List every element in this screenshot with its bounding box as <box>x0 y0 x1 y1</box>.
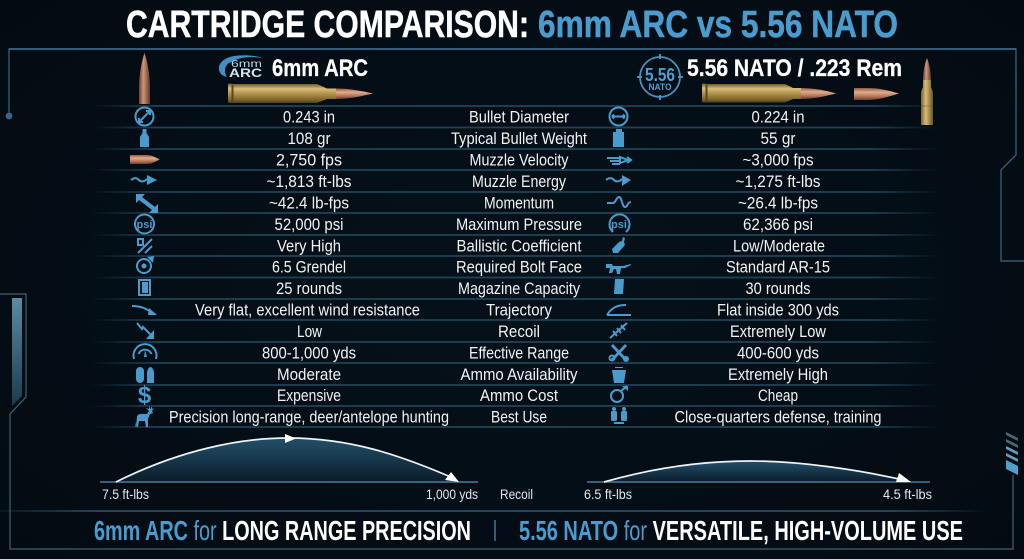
row: muzzle energy: Muzzle Energy <box>472 172 567 191</box>
row: effective range: 400-600 yds <box>737 344 819 362</box>
row: muzzle energy: ~1,275 ft-lbs <box>736 172 820 191</box>
6mm ARC logo: 6mm <box>231 58 262 70</box>
icon: momentum right <box>607 197 631 207</box>
icon: dollar left: $ <box>138 382 152 409</box>
row: muzzle energy: ~1,813 ft-lbs <box>266 172 352 191</box>
5.56 NATO badge <box>637 54 683 100</box>
row: muzzle velocity <box>276 150 814 170</box>
icon: energy left <box>131 175 157 185</box>
icon: psi right <box>610 214 630 232</box>
icon: trajectory left <box>132 306 157 315</box>
icon: cup right <box>612 367 626 383</box>
icon: ballistic coefficient right <box>612 237 625 253</box>
row: required bolt face: Standard AR-15 <box>726 258 830 276</box>
5.56 NATO heading: 5.56 NATO / .223 Rem <box>687 55 902 82</box>
row: required bolt face <box>272 258 830 276</box>
row: trajectory <box>195 300 839 320</box>
icon: psi right: psi <box>611 219 627 231</box>
row: ballistic coefficient: Ballistic Coefficient <box>456 236 582 256</box>
row: ballistic coefficient <box>277 236 825 256</box>
6mm ARC logo: ARC <box>229 66 262 80</box>
row: bullet diameter: Bullet Diameter <box>469 108 569 126</box>
table row lines <box>90 106 940 427</box>
vertical 5.56 cartridge <box>921 58 933 125</box>
row: best use: Best Use <box>491 408 547 426</box>
row: momentum: ~26.4 lb-fps <box>738 194 818 212</box>
row: bullet diameter: 0.224 in <box>752 108 804 126</box>
icon: two figures right <box>611 407 627 423</box>
6mm ARC logo <box>219 55 262 80</box>
title <box>126 4 898 46</box>
row: maximum pressure: Maximum Pressure <box>456 215 582 234</box>
row: trajectory: Trajectory <box>486 300 553 320</box>
row: bullet diameter <box>283 108 804 126</box>
row: bullet diameter: 0.243 in <box>283 108 335 126</box>
row: ammo cost <box>277 386 798 405</box>
icon: recoil left <box>137 323 154 339</box>
6mm ARC heading: 6mm ARC <box>272 55 368 82</box>
recoil chart: 5.56 NATO: 6.5 ft-lbs <box>584 486 632 502</box>
row: bullet weight <box>288 129 796 148</box>
row: best use: Precision long-range, deer/antelope hunting <box>169 408 449 426</box>
icon: magazine right <box>614 279 624 294</box>
icon: momentum left <box>136 194 158 213</box>
icon: crossed tools right <box>610 345 629 362</box>
5.56 NATO cartridge <box>702 84 836 102</box>
icon: rifle right <box>606 264 631 274</box>
row: ammo availability: Moderate <box>277 365 341 384</box>
row: recoil: Extremely Low <box>730 322 827 341</box>
row: ammo cost: Expensive <box>277 386 341 405</box>
row: maximum pressure <box>274 215 813 234</box>
icon: deer left <box>135 406 154 427</box>
icon: magazine left <box>139 280 150 295</box>
row: magazine capacity: 30 rounds <box>746 279 810 298</box>
icon: psi left <box>135 214 154 234</box>
row: ballistic coefficient: Very High <box>277 236 341 256</box>
recoil chart: 6mm ARC: 7.5 ft-lbs <box>102 486 149 502</box>
title: CARTRIDGE COMPARISON: <box>126 4 529 46</box>
row: ammo availability <box>277 365 828 384</box>
row: muzzle velocity: 2,750 fps <box>276 150 342 170</box>
row: magazine capacity: 25 rounds <box>276 279 342 298</box>
row: momentum <box>269 194 818 212</box>
icon: diameter left <box>136 108 154 126</box>
row: recoil: Low <box>297 322 323 341</box>
row: ammo availability: Ammo Availability <box>460 365 578 384</box>
row: bullet weight: 55 gr <box>760 129 796 148</box>
row: best use <box>169 408 882 426</box>
row: maximum pressure: 52,000 psi <box>274 215 344 234</box>
row: required bolt face: 6.5 Grendel <box>272 258 346 276</box>
recoil chart: 5.56 NATO <box>584 461 932 502</box>
row: ammo cost: Ammo Cost <box>480 386 558 405</box>
row: muzzle velocity: Muzzle Velocity <box>470 150 569 170</box>
row: effective range: 800-1,000 yds <box>262 344 356 362</box>
row: ballistic coefficient: Low/Moderate <box>733 236 825 256</box>
icon: psi left: psi <box>137 219 152 231</box>
icon: gauge left <box>134 344 156 359</box>
row: required bolt face: Required Bolt Face <box>456 258 582 276</box>
6mm ARC cartridge <box>228 84 373 103</box>
icon: ammo left <box>136 367 154 383</box>
icon: bolt face left <box>137 256 154 273</box>
row: bullet weight: 108 gr <box>288 129 331 148</box>
row: recoil: Recoil <box>498 322 540 341</box>
icon: velocity bullet <box>130 155 160 164</box>
row: magazine capacity <box>276 279 810 298</box>
row: ammo cost: Cheap <box>758 386 798 405</box>
comparison table <box>169 108 882 426</box>
row: ammo availability: Extremely High <box>728 365 828 384</box>
recoil chart: 5.56 NATO: 4.5 ft-lbs <box>883 486 932 502</box>
icon: diameter right <box>610 108 628 126</box>
5.56 NATO badge: NATO <box>648 82 672 92</box>
icon: weight left <box>140 129 149 147</box>
row: recoil <box>297 322 827 341</box>
recoil label: Recoil <box>500 486 533 502</box>
left vertical bullet <box>139 53 150 104</box>
icon: energy right <box>606 175 631 186</box>
row: best use: Close-quarters defense, training <box>674 408 882 426</box>
recoil chart: 6mm ARC: 1,000 yds <box>426 486 478 502</box>
icon: velocity right <box>607 157 631 164</box>
row: momentum: Momentum <box>484 194 554 212</box>
loose bullet <box>854 88 899 100</box>
recoil chart: 6mm ARC <box>100 434 478 502</box>
footer: 6mm ARC verdict: 6mm ARC for LONG RANGE PRECISION <box>94 515 471 546</box>
row: trajectory: Very flat, excellent wind resistance <box>195 300 420 320</box>
row: magazine capacity: Magazine Capacity <box>458 279 581 298</box>
row: momentum: ~42.4 lb-fps <box>269 194 349 212</box>
row: muzzle velocity: ~3,000 fps <box>742 150 814 170</box>
row: trajectory: Flat inside 300 yds <box>717 300 839 320</box>
icon: male symbol right <box>611 386 628 402</box>
row: maximum pressure: 62,366 psi <box>743 215 813 234</box>
row: effective range: Effective Range <box>469 344 569 362</box>
title: 6mm ARC vs 5.56 NATO <box>538 4 898 46</box>
5.56 NATO badge: 5.56 <box>645 65 675 85</box>
row: effective range <box>262 344 819 362</box>
icon: trajectory right <box>607 305 631 315</box>
row: bullet weight: Typical Bullet Weight <box>451 129 587 148</box>
footer divider lines <box>0 511 990 541</box>
icon: recoil right <box>610 323 627 338</box>
row: muzzle energy <box>266 172 820 191</box>
icon: weight right <box>613 129 624 147</box>
icon: ballistic coefficient left <box>138 239 152 253</box>
